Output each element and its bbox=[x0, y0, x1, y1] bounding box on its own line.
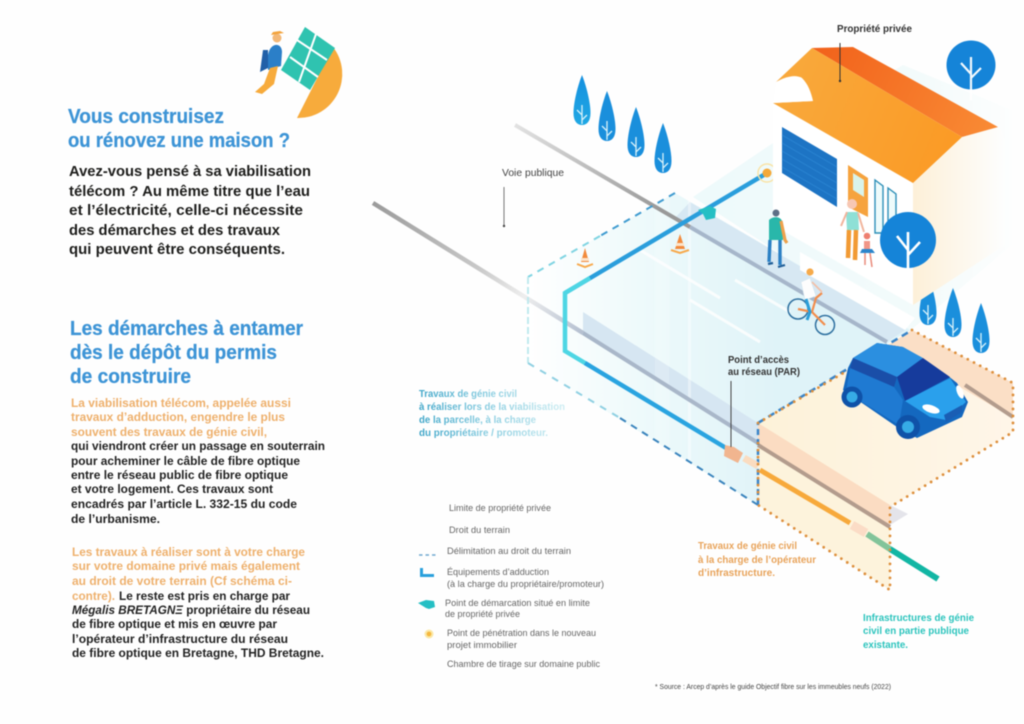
intro text block: qui peuvent être conséquents. bbox=[69, 241, 285, 258]
diagram: fibre network segments bbox=[724, 445, 938, 579]
legend: Droit du terrain bbox=[449, 525, 510, 536]
callout: travaux opérateur: à la charge de l’opérateur bbox=[698, 554, 816, 566]
legend: Chambre de tirage sur domaine public bbox=[447, 659, 600, 670]
legend: Point de pénétration dans le nouveau bbox=[447, 628, 596, 639]
text block: viabilisation: entre le réseau public de fibre optique bbox=[71, 468, 288, 482]
text block: viabilisation bbox=[71, 396, 325, 526]
callout: travaux propriétaire: de la parcelle, à la charge bbox=[419, 415, 536, 426]
legend: Point de démarcation situé en limite bbox=[445, 598, 590, 609]
diagram: public works zone bbox=[758, 330, 1013, 590]
icon: traffic cone right bbox=[671, 234, 689, 253]
icon: demarcation point bbox=[698, 206, 716, 220]
label: point d'accès au réseau: Point d’accès bbox=[728, 355, 789, 366]
source note: * Source : Arcep d’après le guide Objectif fibre sur les immeubles neufs (2022) bbox=[655, 682, 891, 691]
callout: travaux propriétaire: à réaliser lors de la viabilisation bbox=[419, 402, 565, 413]
diagram: public road kerbs bbox=[373, 125, 887, 443]
callout: infrastructures existantes: civil en partie publique bbox=[863, 625, 969, 637]
trees: upper row bbox=[574, 75, 672, 173]
person: adult and child bbox=[841, 199, 875, 267]
legend bbox=[418, 503, 604, 670]
diagram: ground plots bbox=[528, 65, 1012, 505]
text block: travaux à réaliser: Mégalis BRETAGNΞ propriétaire du réseau bbox=[72, 603, 310, 617]
label: voie publique: Voie publique bbox=[502, 168, 564, 179]
legend: Limite de propriété privée bbox=[449, 503, 551, 514]
cyclist bbox=[788, 268, 834, 334]
text block: travaux à réaliser: de fibre optique en Bretagne, THD Bretagne. bbox=[72, 646, 324, 660]
label: propriété privée bbox=[837, 24, 912, 82]
callout: infrastructures existantes: Infrastructures de génie bbox=[863, 612, 974, 624]
heading: vous construisez: ou rénovez une maison ? bbox=[68, 130, 290, 152]
label: propriété privée: Propriété privée bbox=[837, 24, 912, 35]
tree: round front bbox=[880, 212, 936, 278]
callout: travaux opérateur: Travaux de génie civil bbox=[698, 540, 797, 552]
diagram: plot boundary dashes bbox=[528, 193, 912, 505]
trees: right row bbox=[920, 275, 990, 353]
callout: infrastructures existantes: existante. bbox=[863, 639, 908, 651]
text block: travaux à réaliser: contre). bbox=[72, 589, 115, 603]
person: walker bbox=[768, 210, 787, 267]
text block: viabilisation: souvent des travaux de génie civil, bbox=[71, 425, 267, 439]
label: point d'accès au réseau: au réseau (PAR) bbox=[728, 367, 800, 378]
heading: les démarches: de construire bbox=[70, 366, 191, 388]
text block: viabilisation: qui viendront créer un passage en souterrain bbox=[71, 439, 325, 453]
text block: travaux à réaliser bbox=[72, 545, 324, 660]
icon: traffic cone left bbox=[577, 248, 593, 267]
legend: Équipements d’adduction bbox=[447, 567, 549, 578]
text block: travaux à réaliser: Le reste est pris en charge par bbox=[119, 589, 290, 603]
heading: les démarches: Les démarches à entamer bbox=[70, 318, 303, 340]
heading: les démarches bbox=[70, 318, 303, 388]
intro text block: et l’électricité, celle-ci nécessite bbox=[69, 202, 303, 219]
callout: travaux propriétaire bbox=[419, 389, 565, 439]
text block: viabilisation: de l’urbanisme. bbox=[71, 512, 160, 526]
heading: les démarches: dès le dépôt du permis bbox=[70, 342, 277, 364]
text block: travaux à réaliser: au droit de votre terrain (Cf schéma ci- bbox=[72, 574, 292, 588]
icon: penetration point bbox=[758, 164, 776, 182]
text block: viabilisation: La viabilisation télécom, appelée aussi bbox=[71, 396, 291, 410]
intro text block: des démarches et des travaux bbox=[69, 222, 281, 239]
intro text block: Avez-vous pensé à sa viabilisation bbox=[69, 163, 311, 180]
diagram: orange dotted limit bbox=[758, 330, 1013, 590]
intro text block: télécom ? Au même titre que l’eau bbox=[69, 183, 310, 200]
text block: viabilisation: travaux d’adduction, engendre le plus bbox=[71, 410, 285, 424]
text block: travaux à réaliser: Les travaux à réaliser sont à votre charge bbox=[72, 545, 305, 559]
heading: vous construisez bbox=[68, 106, 290, 152]
legend: projet immobilier bbox=[447, 640, 517, 651]
tree: round upper right bbox=[946, 40, 996, 100]
callout: travaux opérateur bbox=[698, 540, 816, 579]
heading: vous construisez: Vous construisez bbox=[68, 106, 224, 128]
callout: travaux opérateur: d’infrastructure. bbox=[698, 567, 775, 579]
text block: travaux à réaliser: l’opérateur d’infrastructure du réseau bbox=[72, 632, 288, 646]
intro text block bbox=[69, 163, 311, 258]
label: point d'accès au réseau bbox=[728, 355, 800, 447]
house bbox=[773, 47, 1005, 305]
car bbox=[842, 343, 968, 439]
legend: (à la charge du propriétaire/promoteur) bbox=[447, 579, 604, 590]
illustration: worker installing panel bbox=[255, 27, 342, 118]
legend: Délimitation au droit du terrain bbox=[447, 546, 571, 557]
label: voie publique bbox=[502, 168, 564, 227]
text block: viabilisation: et votre logement. Ces travaux sont bbox=[71, 482, 273, 496]
callout: travaux propriétaire: du propriétaire / promoteur. bbox=[419, 428, 548, 439]
text block: viabilisation: pour acheminer le câble de fibre optique bbox=[71, 454, 300, 468]
legend: de propriété privée bbox=[445, 609, 520, 620]
callout: travaux propriétaire: Travaux de génie civil bbox=[419, 389, 517, 400]
diagram: adduction equipment line bbox=[565, 173, 767, 448]
text block: viabilisation: encadrés par l’article L. 332-15 du code bbox=[71, 497, 297, 511]
text block: travaux à réaliser: de fibre optique et mis en œuvre par bbox=[72, 617, 277, 631]
callout: infrastructures existantes bbox=[863, 612, 974, 651]
text block: travaux à réaliser: sur votre domaine privé mais également bbox=[72, 559, 300, 573]
